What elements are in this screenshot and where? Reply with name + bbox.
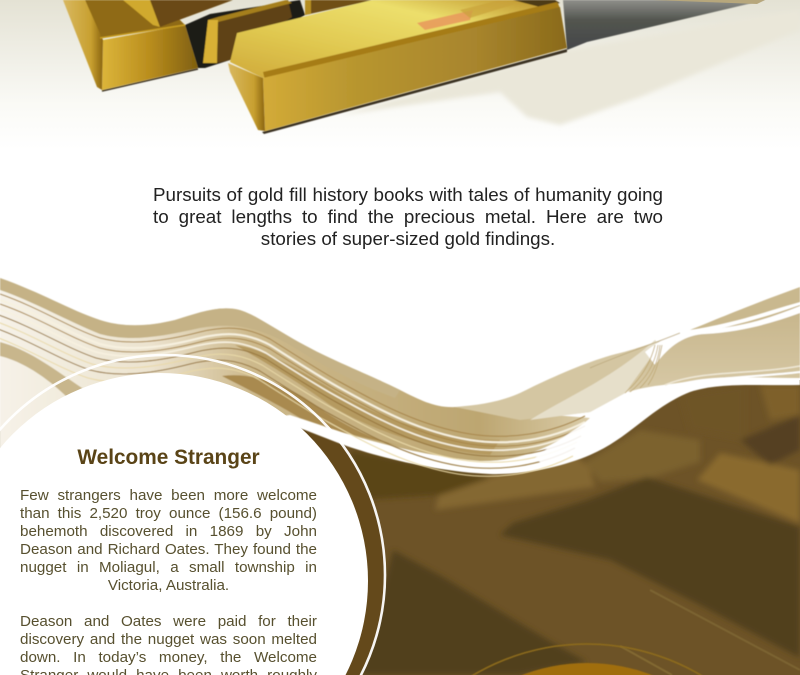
lower dark band near the circle [222,375,400,446]
blocks of gold in the photo [350,385,800,675]
dark gap between bars [185,0,305,68]
white ring line [0,355,385,675]
photo: floor shadows [340,0,800,125]
upper gold bar [123,0,233,27]
photo: gold bars [63,0,567,134]
dark bar top [500,477,800,658]
story text: Welcome Stranger [20,487,317,675]
middle gold bar [203,0,292,63]
story text: Welcome Stranger: nugget in Moliagul, a small township in [20,559,317,576]
left lower beige band [0,342,85,400]
intro text: to great lengths to find the precious metal. Here are two [153,206,663,227]
photo: studio floor [0,0,800,150]
white circle panel [0,373,368,675]
main strand band [0,278,590,461]
intro text: Pursuits of gold fill history books with tales of humanity going [153,184,663,205]
flowing wave [0,278,800,476]
left gold bar [63,0,198,91]
intro text: stories of super-sized gold findings. [261,228,555,249]
story text: Welcome Stranger: Deason and Richard Oates. They found the [20,541,317,558]
top brown band [0,278,400,398]
gold circle at the bottom with ring [364,644,800,675]
story text: Welcome Stranger: behemoth discovered in 1869 by John [20,523,317,540]
white wave base [0,150,800,474]
upper shadow [350,450,490,500]
story text: Welcome Stranger: Victoria, Australia. [108,577,229,594]
story text: Welcome Stranger: Few strangers have been more welcome [20,487,317,504]
white streak [645,306,800,365]
front gold bar [228,0,567,134]
right rear gold bar [305,0,372,15]
story text: Welcome Stranger: discovery and the nugget was soon melted [20,631,317,648]
photo: gold bars background [280,380,800,675]
middle lobe [455,335,680,420]
right lobe [628,305,800,392]
intro text [153,184,663,249]
highlight edge [650,590,800,670]
story text: Welcome Stranger: Deason and Oates were paid for their [20,613,317,630]
story text: Welcome Stranger: than this 2,520 troy ounce (156.6 pound) [20,505,317,522]
white shred at the wave tail [535,392,640,466]
fan of fine threads [625,345,662,393]
story text: Welcome Stranger: down. In today’s money, the Welcome [20,649,317,666]
heading: Welcome Stranger: Welcome Stranger [77,446,260,469]
threads through the whole wave [0,294,585,476]
dark brown ring circle [0,355,385,675]
dark wedge left [360,550,587,675]
